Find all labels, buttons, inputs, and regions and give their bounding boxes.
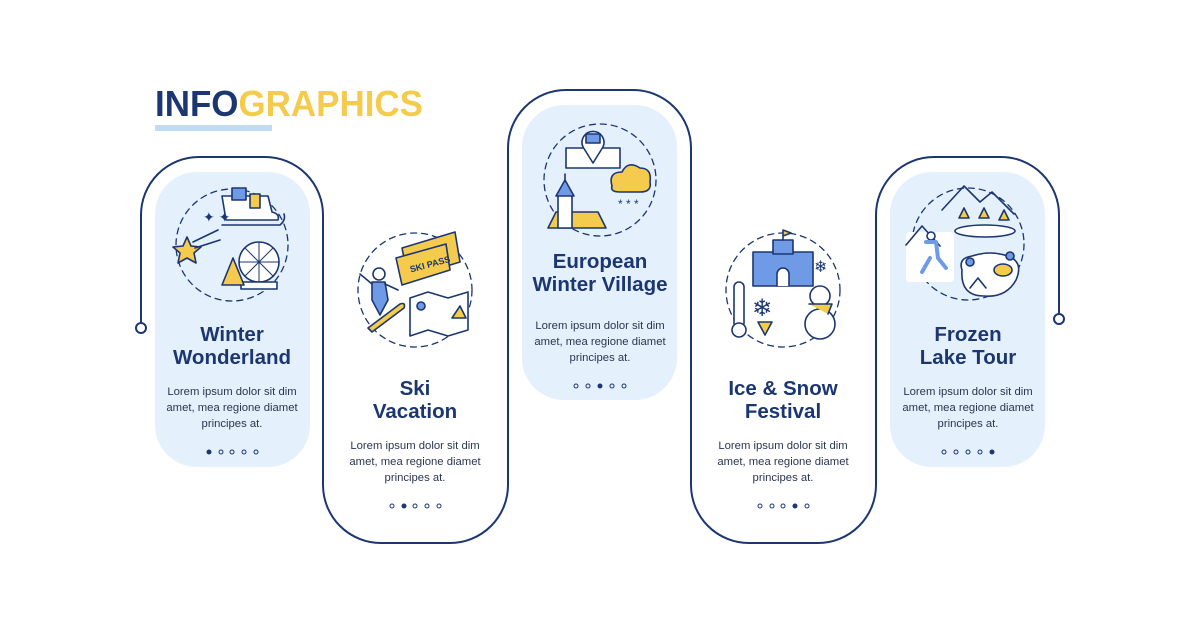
text block: principes at. <box>202 418 262 430</box>
text block: principes at. <box>938 418 998 430</box>
text block: amet, mea regione diamet <box>166 402 298 414</box>
text block: Lorem ipsum dolor sit dim <box>535 320 665 332</box>
title: Winter <box>200 323 264 346</box>
text block: Lorem ipsum dolor sit dim <box>350 440 480 452</box>
panel: Frozen Lake Tour <box>902 186 1034 454</box>
connecting outline <box>136 90 1064 543</box>
pagination dots <box>207 450 258 454</box>
pagination dots <box>574 384 626 388</box>
title: Wonderland <box>173 346 291 369</box>
text block: principes at. <box>753 472 813 484</box>
text block: Lorem ipsum dolor sit dim <box>167 386 297 398</box>
text block: Lorem ipsum dolor sit dim <box>718 440 848 452</box>
icon: ice castle thermometer snowman <box>726 230 840 347</box>
icon: snowboarder ski pass map: SKI PASS <box>409 254 451 274</box>
panel: European Winter Village <box>532 124 668 388</box>
title: Lake Tour <box>920 346 1016 369</box>
icon: sleigh ferris wheel star: ✦ ✦ <box>203 209 231 225</box>
text block: amet, mea regione diamet <box>534 336 666 348</box>
panel: Winter Wonderland <box>166 188 298 454</box>
pagination dots <box>758 504 809 508</box>
text block: amet, mea regione diamet <box>902 402 1034 414</box>
title: Vacation <box>373 400 457 423</box>
panel: Ski Vacation <box>349 232 481 508</box>
title: European <box>553 250 647 273</box>
icon: church map snow cloud: * * * <box>618 197 639 211</box>
text block: Lorem ipsum dolor sit dim <box>903 386 1033 398</box>
icon: snowboarder ski pass map <box>358 232 472 347</box>
icon: ice castle thermometer snowman: ❄ <box>752 295 772 322</box>
panel backgrounds <box>155 105 1045 467</box>
panel: Ice & Snow Festival <box>717 230 849 508</box>
text block: principes at. <box>385 472 445 484</box>
title: Festival <box>745 400 821 423</box>
text block: amet, mea regione diamet <box>717 456 849 468</box>
text block: principes at. <box>570 352 630 364</box>
icon: sleigh ferris wheel star <box>173 188 288 301</box>
pagination dots <box>390 504 441 508</box>
title: Ice & Snow <box>728 377 838 400</box>
pagination dots <box>942 450 994 454</box>
icon: ice castle thermometer snowman: ❄ <box>814 259 827 276</box>
text block: amet, mea regione diamet <box>349 456 481 468</box>
title: INFOGRAPHICS <box>155 83 423 124</box>
icon: church map snow cloud <box>544 124 656 236</box>
title: Frozen <box>934 323 1002 346</box>
icon: hiker mountains lake <box>906 186 1024 300</box>
title: Ski <box>400 377 430 400</box>
title: Winter Village <box>532 273 668 296</box>
